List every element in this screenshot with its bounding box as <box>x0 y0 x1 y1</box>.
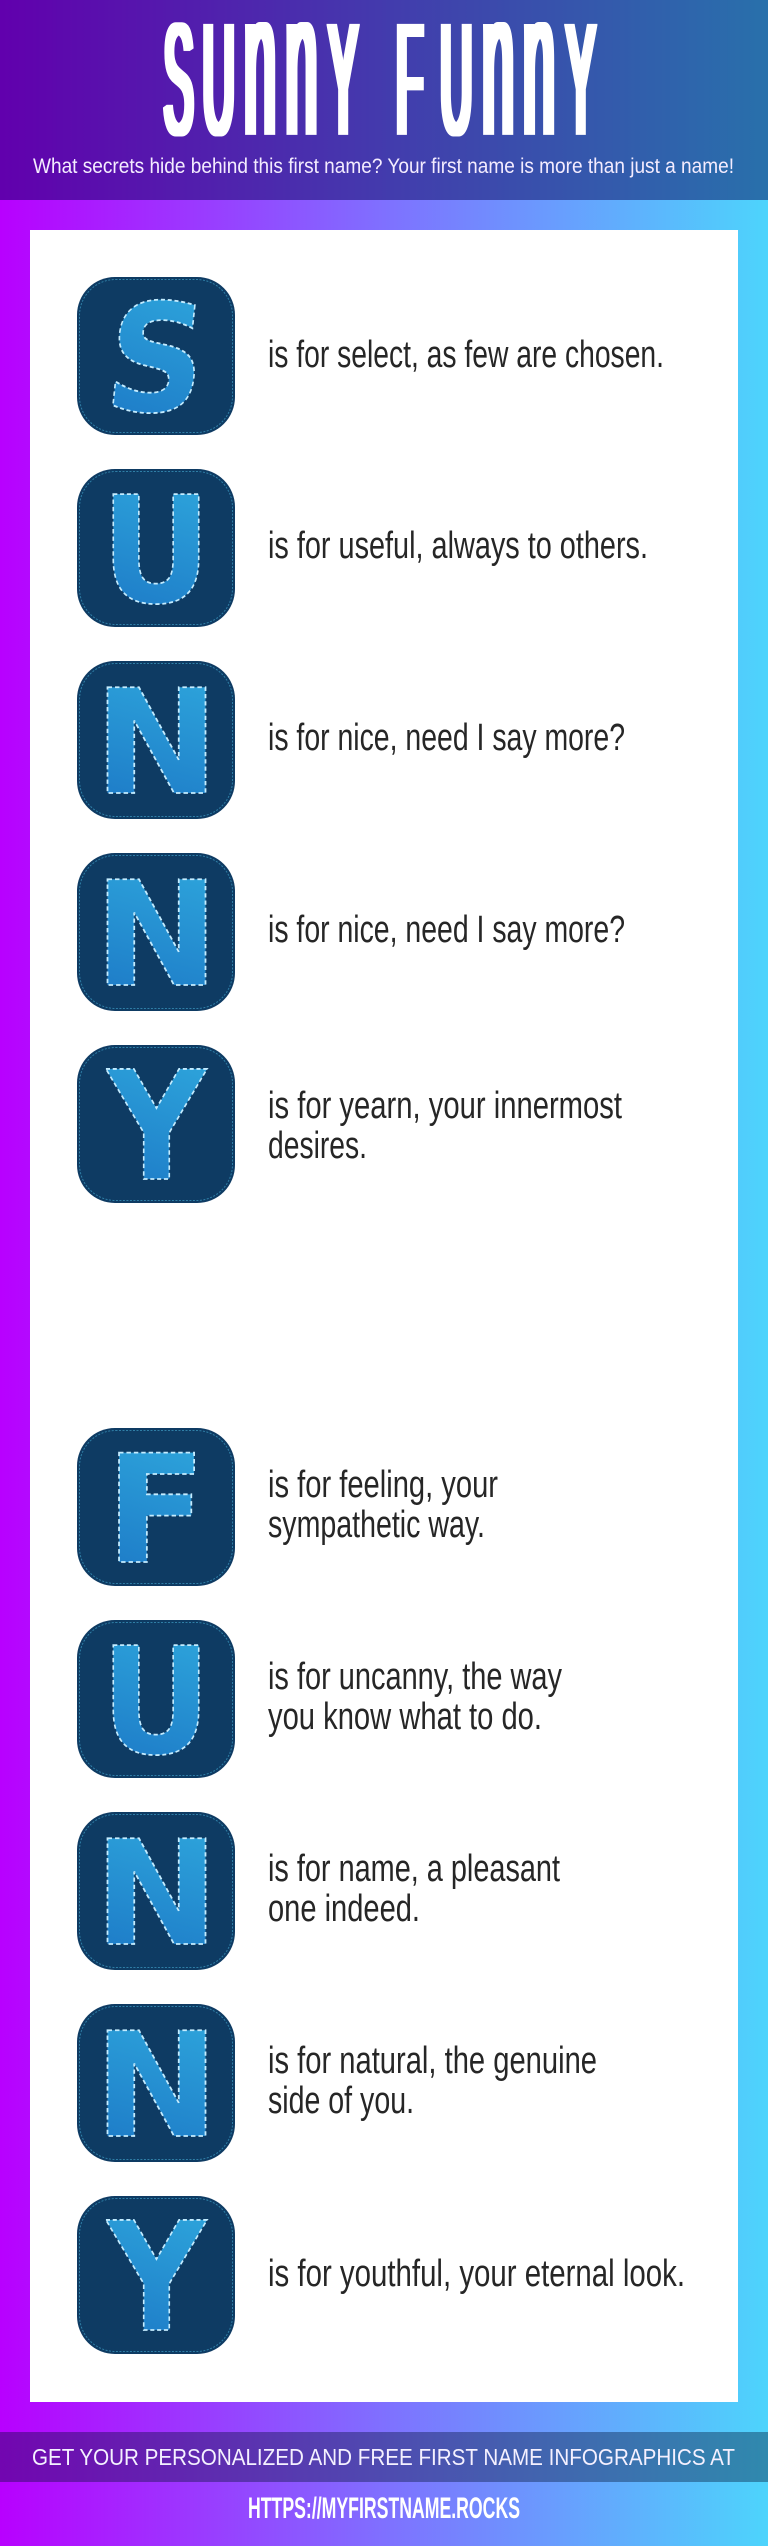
footer url: HTTPS://MYFIRSTNAME.ROCKS <box>248 2492 520 2525</box>
row: N <box>77 658 625 827</box>
text: N third lines: one indeed. <box>268 1888 420 1930</box>
row: Y <box>77 1039 622 1215</box>
white content panel <box>30 230 738 2402</box>
icon: letter F <box>77 1424 235 1598</box>
text: U second lines: you know what to do. <box>268 1696 542 1738</box>
icon: letter U second: U <box>101 1616 211 1788</box>
text: N fourth lines: is for natural, the genuine <box>268 2040 597 2082</box>
text: U second lines: is for uncanny, the way <box>268 1656 562 1698</box>
icon: letter Y: Y <box>105 1039 208 1215</box>
icon: letter U: U <box>101 465 211 637</box>
text: F lines: is for feeling, your <box>268 1464 498 1506</box>
row: N third <box>77 1809 560 1978</box>
icon: letter Y second <box>77 2190 235 2366</box>
row: U second <box>77 1616 562 1788</box>
row: N fourth <box>77 2001 597 2170</box>
icon: letter S: S <box>98 271 215 446</box>
text: N third lines: is for name, a pleasant <box>268 1848 560 1890</box>
text: N fourth lines <box>268 2040 597 2122</box>
text: U line: is for useful, always to others. <box>268 525 648 567</box>
footer band <box>0 2432 768 2482</box>
text: N second line: is for nice, need I say more? <box>268 909 625 951</box>
text: F lines <box>268 1464 498 1546</box>
text: N line: is for nice, need I say more? <box>268 717 625 759</box>
icon: letter N third: N <box>94 1809 219 1978</box>
row: U <box>77 465 648 637</box>
row: N second <box>77 850 625 1019</box>
text: N third lines <box>268 1848 560 1930</box>
icon: letter N fourth: N <box>94 2001 219 2170</box>
text: Y lines <box>268 1085 622 1167</box>
icon: letter N: N <box>94 658 219 827</box>
icon: letter N second: N <box>94 850 219 1019</box>
row: S <box>77 271 664 446</box>
header banner <box>0 0 768 200</box>
title <box>164 0 595 179</box>
text: F lines: sympathetic way. <box>268 1504 485 1546</box>
row: F <box>77 1424 498 1598</box>
text: Y lines: is for yearn, your innermost <box>268 1085 622 1127</box>
icon: letter U <box>77 465 235 637</box>
text: N fourth lines: side of you. <box>268 2080 414 2122</box>
row: Y second <box>77 2190 685 2366</box>
icon: letter F: F <box>105 1424 207 1598</box>
text: Y lines: desires. <box>268 1125 367 1167</box>
icon: letter Y second: Y <box>105 2190 208 2366</box>
icon: letter U second <box>77 1616 235 1788</box>
icon: letter Y <box>77 1039 235 1215</box>
text: U second lines <box>268 1656 562 1738</box>
